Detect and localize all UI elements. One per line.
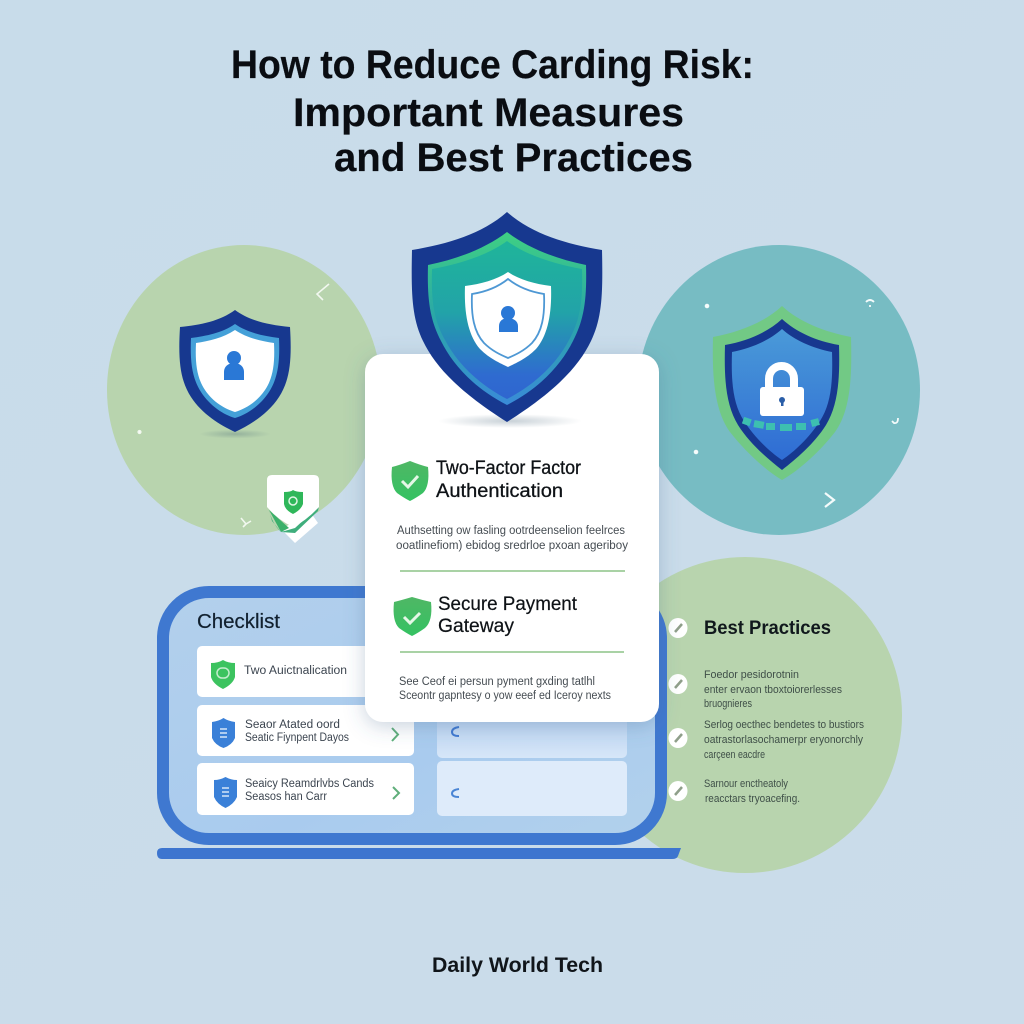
icon: green check shield — [392, 461, 428, 501]
panel: left green circle with user shield — [107, 245, 381, 543]
checklist row 2 — [197, 705, 414, 756]
text: practices list: oatrastorlasochamerpr eryonorchly — [704, 734, 863, 746]
checklist row 1: Two Auictnalication — [244, 665, 347, 677]
heading: best practices: Best Practices — [704, 618, 831, 639]
heading: two-factor: Authentication — [436, 481, 563, 502]
title: How to Reduce Carding Risk: — [231, 43, 754, 87]
panel: center card — [365, 354, 659, 722]
checklist row 2: Seaor Atated oord — [245, 719, 340, 731]
heading: checklist: Checklist — [197, 611, 280, 633]
title — [231, 43, 754, 180]
checklist row 3: Seasos han Carr — [245, 791, 327, 803]
heading: secure payment gateway — [394, 594, 578, 637]
icon: green check shield — [394, 597, 431, 636]
text: practices list: reacctars tryoacefing. — [705, 793, 800, 805]
icon: user shield — [179, 310, 291, 438]
icon: small badge card — [267, 475, 319, 543]
text: gateway description: Sceontr gapntesy o yow eeef ed Iceroy nexts — [399, 690, 611, 702]
inner white shield — [465, 272, 551, 367]
title: and Best Practices — [334, 136, 693, 180]
text: gateway description — [399, 676, 611, 702]
panel: best practices circle — [588, 557, 902, 873]
checklist row 2: Seatic Fiynpent Dayos — [245, 732, 349, 744]
icon: best practices check bullets — [668, 618, 688, 801]
icon: sparkles — [695, 300, 898, 507]
laptop base — [157, 848, 681, 859]
icon: sparkles — [138, 284, 329, 527]
heading: two-factor: Two-Factor Factor — [436, 458, 582, 479]
right column rows — [437, 700, 627, 816]
text: gateway description: See Ceof ei persun pyment gxding tatlhl — [399, 676, 595, 688]
icon: main shield — [412, 212, 602, 428]
laptop screen — [163, 592, 661, 839]
heading: secure payment gateway: Secure Payment — [438, 594, 578, 615]
panel: right teal circle with lock shield — [638, 245, 920, 535]
checklist row 3: Seaicy Reamdrlvbs Cands — [245, 778, 374, 790]
text: two-factor description: Authsetting ow fasling ootrdeenselion feelrces — [397, 525, 625, 537]
text: practices list: Serlog oecthec bendetes to bustiors — [704, 719, 864, 731]
panel: laptop checklist — [157, 592, 681, 859]
text: practices list: bruognieres — [704, 698, 752, 710]
heading: two-factor — [392, 458, 582, 502]
text: two-factor description: ooatlinefiom) ebidog sredrloe pxoan ageriboy — [396, 540, 628, 552]
text: practices list: Sarnour enctheatoly — [704, 778, 788, 790]
heading: secure payment gateway: Gateway — [438, 616, 515, 637]
checklist row 1 — [197, 646, 414, 697]
text: practices list: Foedor pesidorotnin — [704, 669, 799, 681]
text: practices list — [704, 669, 864, 805]
icon: lock shield — [713, 306, 851, 480]
text: practices list: carçeen eacdre — [704, 749, 765, 761]
footer brand: Daily World Tech — [432, 954, 603, 977]
text: two-factor description — [396, 525, 628, 552]
title: Important Measures — [293, 91, 684, 135]
checklist row 3 — [197, 763, 414, 815]
text: practices list: enter ervaon tboxtoiorerlesses — [704, 684, 842, 696]
